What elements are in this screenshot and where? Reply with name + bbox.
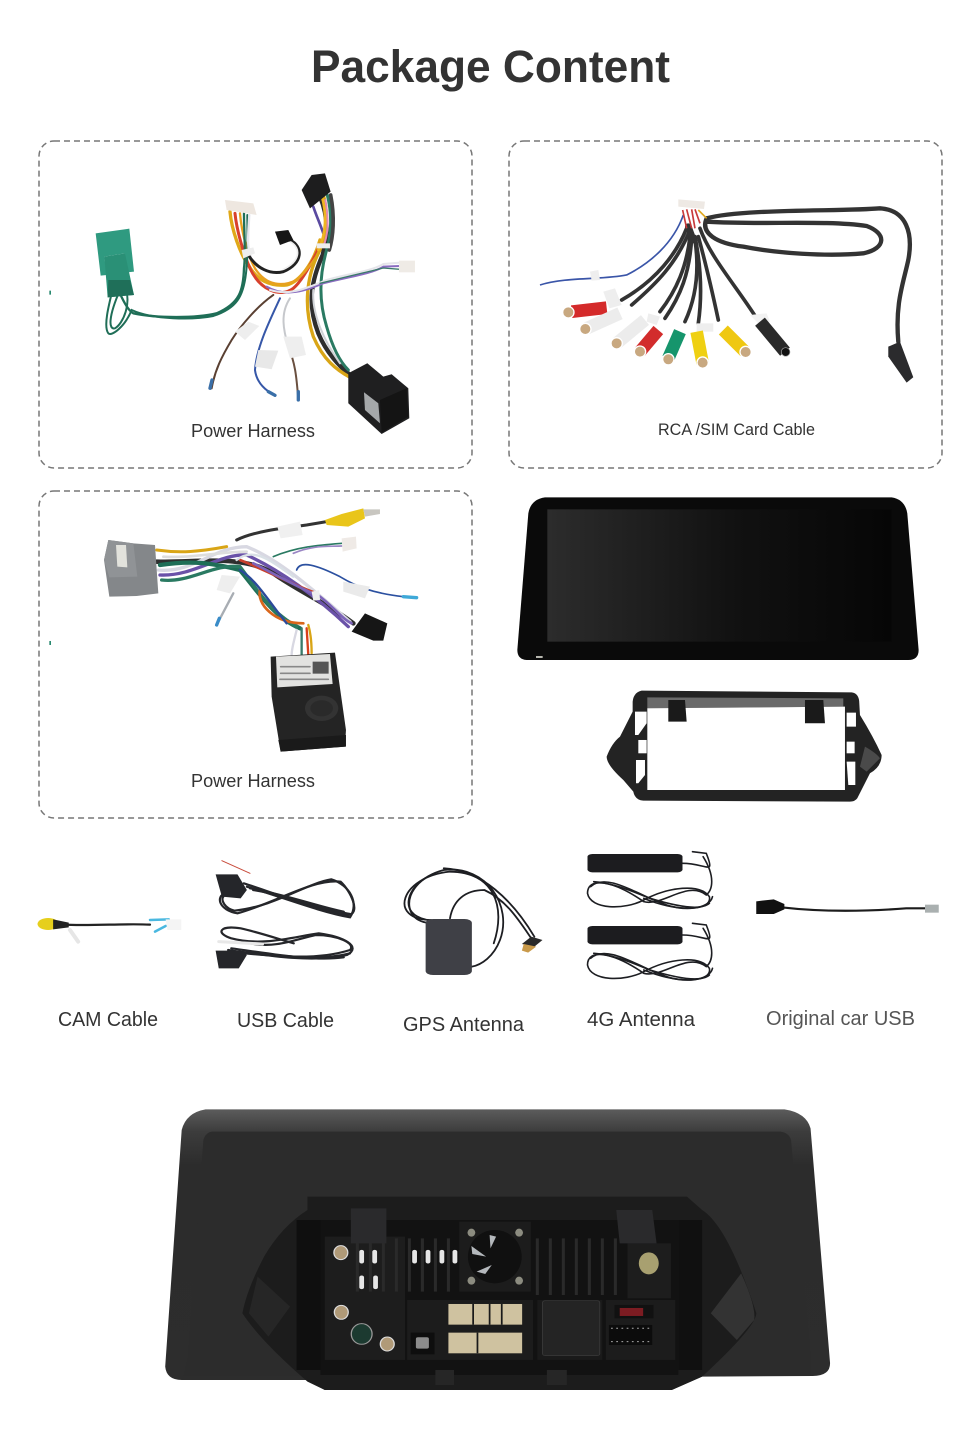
image: USB cables: [216, 861, 354, 968]
label: Original car USB: Original car USB: [766, 1008, 915, 1030]
image: back of head unit: [165, 1109, 830, 1390]
vent highlights: [362, 1252, 455, 1287]
panel: RCA and SIM card cable: [509, 141, 942, 468]
panel: power harness 1: [39, 141, 472, 468]
fan: [459, 1222, 531, 1292]
label: RCA /SIM Card Cable: RCA /SIM Card Cable: [658, 420, 815, 439]
image: 4G antennas: [588, 852, 712, 980]
gold sticker: [639, 1252, 659, 1274]
image: original car USB cable: [756, 899, 939, 914]
image: power harness with green and black connectors: [49, 173, 415, 434]
brackets: [351, 1208, 386, 1243]
bottom clips: [435, 1370, 567, 1385]
label: USB Cable: USB Cable: [237, 1010, 334, 1032]
recessed back panel: [184, 1132, 811, 1376]
mounting frame around ports: [242, 1197, 756, 1390]
image: GPS antenna: [405, 868, 542, 975]
image: power harness with control box: [49, 508, 417, 752]
heatsink fins: [357, 1238, 615, 1295]
wiring sockets: [448, 1304, 522, 1353]
image: CAM cable: [38, 918, 181, 942]
image: RCA plugs and SIM cable: [540, 199, 913, 383]
label: GPS Antenna: GPS Antenna: [403, 1014, 525, 1036]
label: power harness: Power Harness: [191, 771, 315, 791]
port housing: [320, 1220, 678, 1375]
antenna ports: [334, 1246, 394, 1351]
label: CAM Cable: CAM Cable: [58, 1009, 158, 1031]
back housing: [165, 1109, 830, 1390]
image: mounting frame: [607, 691, 882, 802]
panel: power harness 2: [39, 491, 472, 818]
label: power harness: Power Harness: [191, 421, 315, 441]
label: 4G Antenna: 4G Antenna: [587, 1009, 696, 1031]
image: display screen: [517, 497, 919, 660]
title: Package Content: [311, 41, 670, 92]
